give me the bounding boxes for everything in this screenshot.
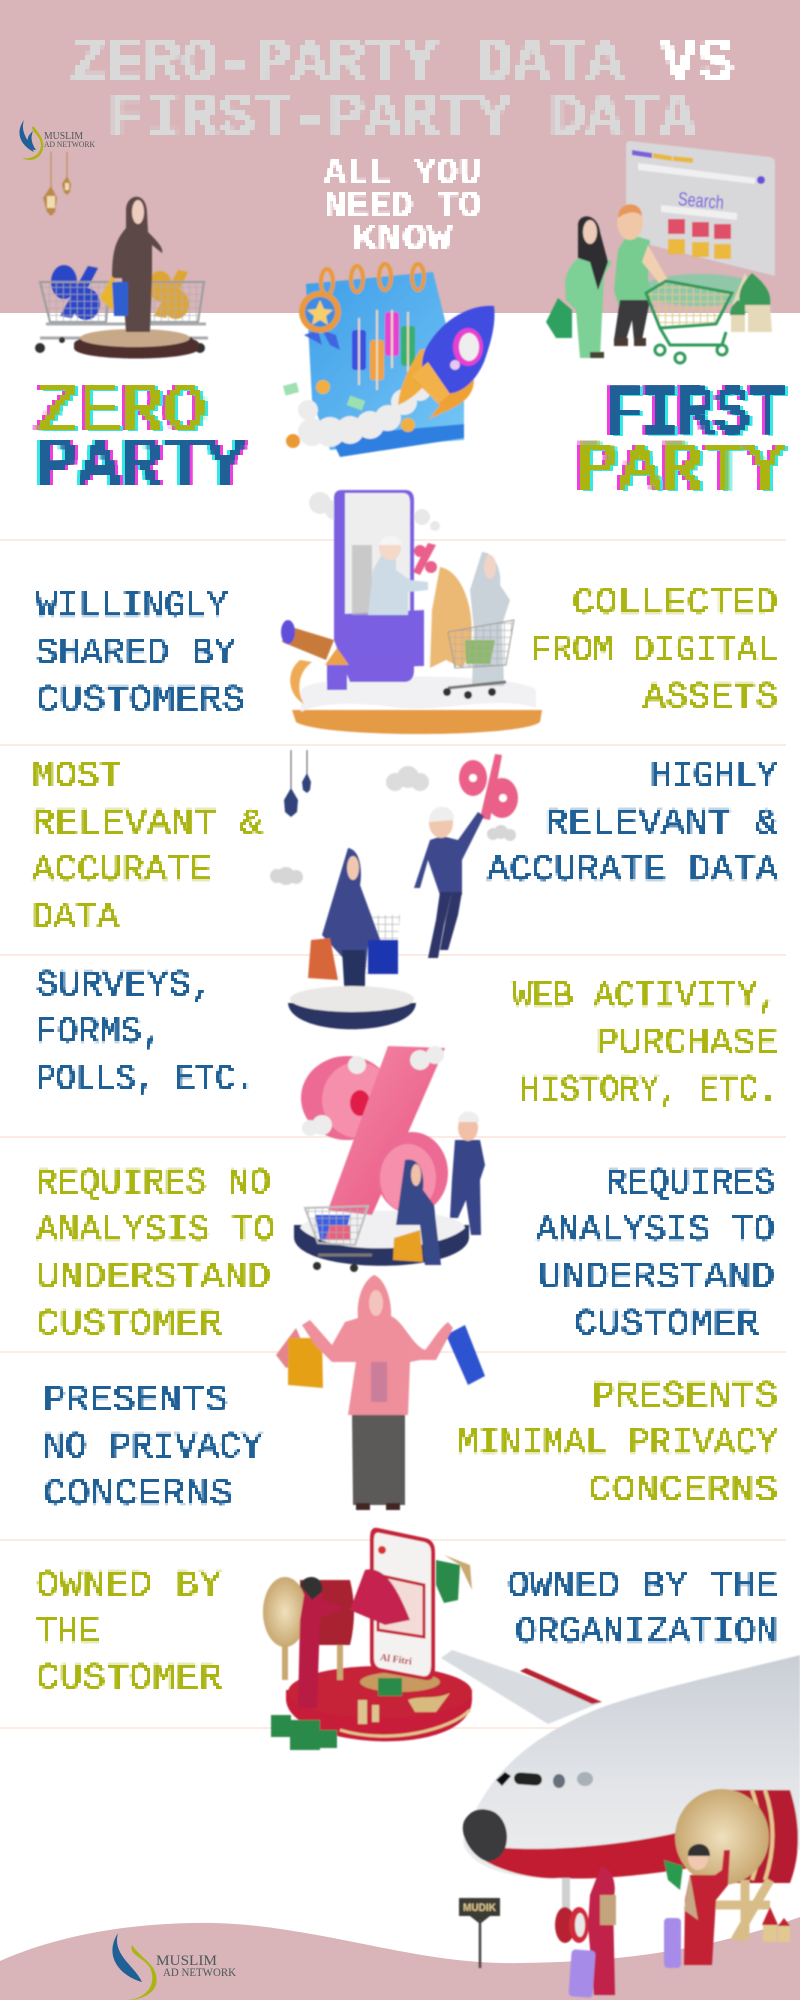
- row 2 right: highly relevant: [487, 756, 778, 891]
- percent sign: [413, 543, 437, 575]
- row 5 right: minimal privacy: MINIMAL PRIVACY: [457, 1423, 778, 1464]
- row 4 left: requires no analysis: REQUIRES NO: [36, 1163, 271, 1204]
- illustration: calendar and rocket: [283, 264, 495, 457]
- woman with cart: [443, 552, 514, 699]
- man traveller: [664, 1844, 730, 1968]
- red lanterns: [762, 1907, 790, 1942]
- row 3 left: surveys: POLLS, ETC.: [36, 1059, 255, 1100]
- landing gear: [555, 1878, 589, 1943]
- row 4 right: requires analysis: ANALYSIS TO: [536, 1210, 775, 1251]
- row 5 left: no privacy: [43, 1380, 263, 1515]
- illustration: phone with cannon on orange podium: [281, 490, 542, 734]
- wing: [441, 1650, 602, 1724]
- yellow percent: [148, 270, 189, 319]
- moon drum: [430, 567, 472, 668]
- blue percent: [51, 265, 100, 320]
- title: [70, 30, 734, 154]
- heading: zero party: ZERO: [36, 375, 206, 451]
- row 6 right: owned by organization: ORGANIZATION: [515, 1612, 778, 1653]
- clouds: [270, 766, 516, 885]
- illustration: woman in pink with bags: [276, 1275, 485, 1510]
- rocket: [398, 306, 495, 420]
- row 5 left: no privacy: CONCERNS: [43, 1474, 233, 1515]
- woman in green: [565, 216, 612, 358]
- logo: top left: MUSLIM: [44, 130, 83, 142]
- row 6 left: owned by customer: [36, 1565, 222, 1699]
- illustration: search browser and shopping couple: [546, 141, 775, 363]
- row 3 right: web activity: HISTORY, ETC.: [520, 1070, 778, 1111]
- title: ZERO-PARTY DATA VS: [70, 30, 734, 99]
- big drum: [675, 1789, 798, 1940]
- shopping cart: [305, 1206, 372, 1272]
- cannon: [281, 620, 349, 704]
- heading: zero party: [36, 375, 247, 506]
- phone: [334, 490, 424, 682]
- green mosque lantern: [730, 273, 772, 332]
- icon: hanging lanterns top left: [43, 152, 71, 216]
- logo: bottom: [112, 1933, 236, 2000]
- row 5 right: minimal privacy: CONCERNS: [588, 1470, 778, 1511]
- row 6 left: owned by customer: THE: [36, 1612, 100, 1653]
- candlestick chart: [352, 310, 415, 390]
- row 2 right: highly relevant: HIGHLY: [650, 756, 778, 797]
- row 4 left: requires no analysis: [36, 1163, 275, 1345]
- mudik sign: [459, 1898, 500, 1968]
- row 3 left: surveys: SURVEYS,: [36, 965, 213, 1006]
- pink footer wave: [0, 1917, 800, 2000]
- man in phone: [352, 536, 428, 615]
- row 4 right: requires analysis: CUSTOMER: [574, 1304, 759, 1345]
- row 2 right: highly relevant: ACCURATE DATA: [487, 850, 778, 891]
- row 2 right: highly relevant: RELEVANT &: [545, 803, 778, 844]
- heading: first party: PARTY: [577, 433, 786, 509]
- hanging lanterns: [284, 750, 311, 817]
- row 4 right: requires analysis: REQUIRES: [606, 1163, 775, 1204]
- percent sign: [459, 754, 518, 820]
- logo: top left: AD NETWORK: [44, 139, 96, 149]
- logo: top left: [19, 120, 96, 160]
- nose cone: [463, 1809, 507, 1861]
- phone: Al Fitri: [379, 1652, 413, 1668]
- podium: [294, 1211, 469, 1266]
- browser window: [626, 141, 775, 306]
- illustration: big percent sign with couple: [294, 1046, 485, 1272]
- row 5 left: no privacy: NO PRIVACY: [43, 1427, 263, 1468]
- podium: [288, 986, 416, 1029]
- heading: first party: [577, 377, 786, 509]
- row 6 right: owned by organization: OWNED BY THE: [507, 1566, 778, 1607]
- subtitle: all you need to know: NEED TO: [324, 186, 481, 227]
- coins and notes: [283, 380, 415, 448]
- illustration: airplane with travellers: [441, 1650, 800, 1998]
- podium: [292, 676, 542, 734]
- row 4 right: requires analysis: [536, 1163, 775, 1345]
- logo: bottom: AD NETWORK: [163, 1965, 236, 1979]
- woman shopper: [308, 848, 400, 1000]
- row 2 left: most relevant: [32, 756, 263, 938]
- row 1 right: collected: [531, 583, 778, 718]
- row 4 left: requires no analysis: UNDERSTAND: [36, 1257, 271, 1298]
- skirt and shoes: [352, 1412, 405, 1510]
- green shopping cart: [646, 281, 732, 363]
- base: [286, 1666, 472, 1741]
- calendar page: [306, 272, 464, 450]
- woman traveller: [568, 1866, 616, 1998]
- row 3 right: web activity: PURCHASE: [596, 1023, 778, 1064]
- row 2 left: most relevant: DATA: [32, 897, 119, 938]
- row 3 left: surveys: FORMS,: [36, 1012, 163, 1053]
- award badge: [299, 291, 341, 350]
- couple: [298, 1569, 410, 1708]
- fuselage: [463, 1655, 800, 1878]
- row 3 right: web activity: [512, 976, 778, 1111]
- row 1 left: willingly shared: CUSTOMERS: [36, 680, 245, 721]
- row 2 left: most relevant: MOST: [32, 756, 122, 797]
- calendar rings: [321, 264, 424, 295]
- row 6 right: owned by organization: [507, 1566, 778, 1653]
- pink header background: [0, 0, 800, 313]
- man in green: [614, 204, 668, 346]
- row 6 left: owned by customer: OWNED BY: [36, 1565, 222, 1606]
- row 6 left: owned by customer: CUSTOMER: [36, 1658, 222, 1699]
- subtitle: all you need to know: KNOW: [352, 219, 452, 260]
- smoke clouds: [298, 379, 431, 447]
- man standing: [450, 1112, 485, 1235]
- woman sitting: [393, 1159, 441, 1265]
- gifts: [271, 1555, 472, 1750]
- row 5 left: no privacy: PRESENTS: [43, 1380, 228, 1421]
- subtitle: all you need to know: ALL YOU: [324, 153, 481, 194]
- row 4 right: requires analysis: UNDERSTAND: [538, 1257, 775, 1298]
- row 3 left: surveys: [36, 965, 255, 1100]
- gifts and lamp on base: [358, 1678, 450, 1724]
- row 1 left: willingly shared: WILLINGLY: [36, 586, 228, 627]
- row 1 right: collected: COLLECTED: [572, 583, 778, 624]
- green bag: [546, 298, 572, 338]
- drum: [263, 1577, 354, 1680]
- row 1 right: collected: ASSETS: [643, 677, 778, 718]
- browser window: Search: [677, 189, 725, 214]
- coat, arms, hijab: [302, 1275, 453, 1415]
- heading: zero party: PARTY: [36, 430, 247, 506]
- row 3 right: web activity: WEB ACTIVITY,: [512, 976, 778, 1017]
- row 1 right: collected: FROM DIGITAL: [531, 630, 778, 671]
- clouds: [309, 492, 440, 531]
- bags: [276, 1325, 485, 1388]
- illustration: woman with shopping cart: [35, 197, 208, 358]
- big percent: [301, 1046, 448, 1215]
- subtitle: all you need to know: [324, 153, 481, 260]
- row 2 left: most relevant: ACCURATE: [32, 850, 212, 891]
- flying man: [414, 807, 484, 958]
- row 4 left: requires no analysis: ANALYSIS TO: [36, 1210, 275, 1251]
- logo: bottom: MUSLIM: [156, 1953, 217, 1969]
- row divider lines: [0, 540, 786, 1728]
- comparison text rows: [32, 583, 778, 1699]
- row 5 right: minimal privacy: [457, 1376, 778, 1511]
- illustration: red phone and drum podium: [263, 1528, 472, 1750]
- illustration: shoppers with flying man: [270, 750, 518, 1029]
- row 2 left: most relevant: RELEVANT &: [32, 803, 263, 844]
- row 1 left: willingly shared: [36, 586, 245, 721]
- clouds: [302, 1046, 444, 1136]
- calendar bottom fold: [330, 424, 464, 457]
- row 4 left: requires no analysis: CUSTOMER: [36, 1304, 222, 1345]
- red belly: [480, 1832, 690, 1879]
- windows: [496, 1772, 593, 1788]
- mudik sign: MUDIK: [463, 1902, 496, 1914]
- row 5 right: minimal privacy: PRESENTS: [592, 1376, 778, 1417]
- row 1 left: willingly shared: SHARED BY: [36, 633, 236, 674]
- phone: [370, 1528, 435, 1680]
- title: FIRST-PARTY DATA: [108, 85, 696, 154]
